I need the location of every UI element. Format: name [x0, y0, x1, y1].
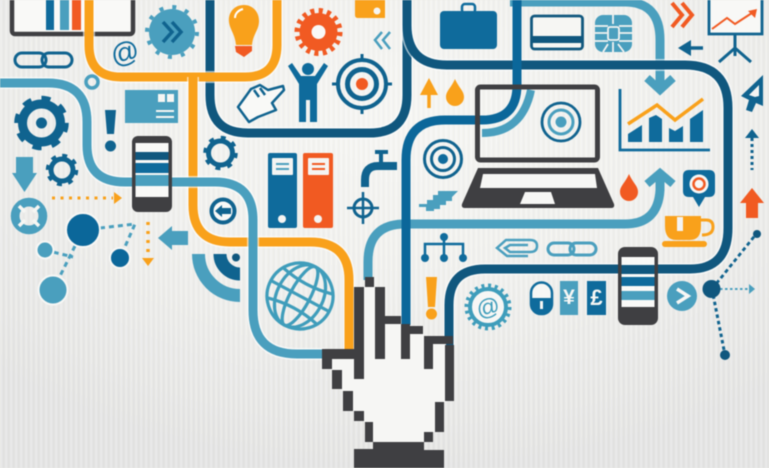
lifebuoy: [12, 198, 46, 234]
map pin: [683, 170, 715, 207]
left arrow: [158, 226, 188, 250]
light blue line: top right with arrow: [510, 2, 673, 90]
orange line: upper loop: [89, 0, 277, 77]
circle chevron button: [667, 281, 697, 311]
red drop: [620, 174, 638, 201]
red double chevron: [672, 3, 692, 27]
red up arrow: [740, 188, 764, 218]
pound tile: [587, 281, 606, 315]
gear: large left: [17, 98, 66, 148]
faucet: [365, 150, 397, 187]
gear with at symbol: @: [473, 291, 503, 323]
chip: [595, 15, 632, 52]
orange drop: [446, 79, 464, 106]
target left of laptop: [424, 140, 462, 178]
gear: centre small: [205, 138, 236, 168]
light blue arc inside laptop: [482, 90, 531, 133]
binder blue: [268, 153, 297, 228]
network nodes left: [36, 213, 135, 304]
pixel hand cursor: [322, 277, 454, 468]
chain link right: [548, 243, 596, 255]
globe: [255, 251, 345, 341]
down arrow: [12, 157, 37, 192]
at symbol: @: [107, 34, 143, 71]
org chart: [421, 233, 467, 262]
dark blue line: upper panel: [210, 0, 407, 133]
credit card: [532, 16, 582, 49]
yen tile: [560, 281, 578, 315]
dotted orange down arrow: [142, 222, 154, 266]
smartphone left: [132, 136, 172, 212]
gear orange: [298, 11, 340, 53]
person arms up: [288, 63, 328, 122]
cursor arrow right: [741, 75, 763, 112]
gear: teal with chevrons: [147, 7, 197, 57]
gear with at symbol: [466, 286, 510, 328]
coffee cup: [662, 216, 713, 247]
network nodes right: [702, 230, 761, 360]
left arrow dark: [678, 40, 703, 56]
chevrons light: [375, 32, 390, 49]
target crosshair: [332, 54, 392, 114]
card panel: [125, 90, 178, 123]
dotted up arrow: [745, 129, 759, 170]
pixel hand outline icon: [238, 85, 284, 122]
yen tile: ¥: [563, 286, 575, 309]
briefcase: [440, 4, 497, 49]
mid blue line: through laptop: [406, 0, 517, 325]
flipchart: [709, 0, 762, 62]
circle back arrow: [212, 200, 234, 222]
paperclip: [497, 240, 537, 256]
light blue line: lower with up arrow: [368, 173, 673, 280]
pound tile: £: [590, 285, 603, 310]
exclamation mark dark: [105, 110, 116, 152]
tablet icon top left: [12, 0, 133, 34]
small crosshair: [347, 192, 379, 224]
chain link: [15, 53, 72, 67]
orange up arrow: [420, 78, 438, 108]
target in laptop: [542, 103, 580, 141]
pixel arrow light: [419, 191, 458, 211]
binder orange: [303, 153, 333, 228]
wifi signal: [198, 254, 240, 296]
orange box top: [355, 0, 385, 18]
dark blue line: long right loop: [407, 25, 728, 345]
light bulb: [229, 5, 259, 57]
exclamation orange: [426, 277, 437, 320]
dotted orange arrow: [52, 192, 122, 204]
light blue line: left: [0, 83, 325, 354]
small ring: [86, 76, 98, 88]
gear: small left: [48, 156, 76, 184]
laptop: [462, 87, 614, 208]
smartphone right: [618, 247, 658, 325]
bar chart: [620, 89, 710, 150]
padlock: [531, 282, 552, 314]
orange line: lower branch: [193, 77, 349, 350]
